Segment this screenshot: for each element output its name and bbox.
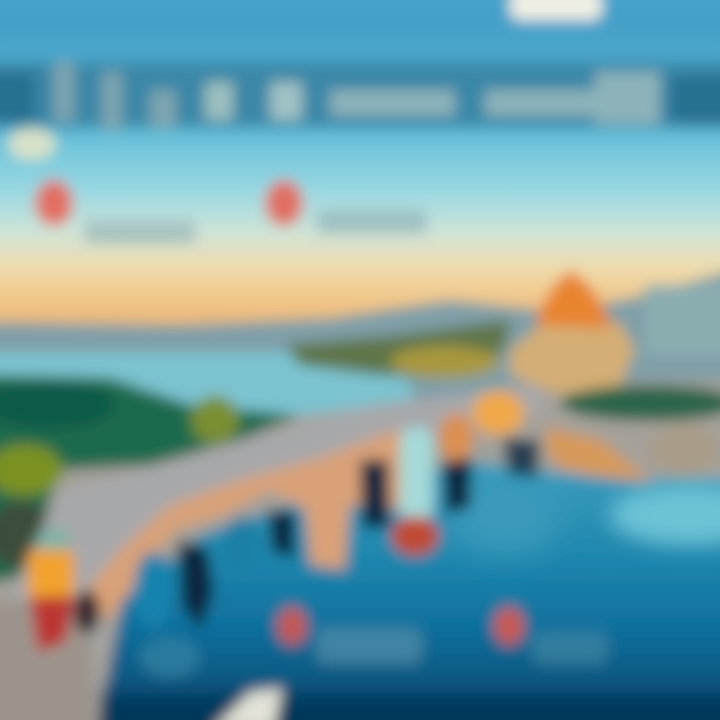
heading text placeholder: illegible title, right words	[270, 72, 660, 124]
colourful stall	[28, 529, 100, 652]
icon: red marker left	[35, 180, 73, 226]
right towers	[645, 285, 720, 355]
pale vertical water gap	[400, 428, 433, 520]
castle with dome	[510, 270, 720, 395]
ground under bridge	[0, 380, 720, 720]
arch: shadows	[178, 438, 540, 630]
bridge deck	[0, 385, 545, 720]
text placeholder: sky right caption	[316, 210, 428, 234]
light water right	[610, 485, 720, 545]
marker group: water left	[277, 607, 422, 664]
left green trees	[0, 375, 300, 585]
bridge	[0, 385, 652, 720]
bridge end masonry	[0, 600, 100, 720]
text placeholder: sky left caption	[84, 220, 196, 244]
icon: red marker water right	[494, 607, 524, 645]
badge: top pale label	[510, 0, 602, 20]
orange highlight	[472, 391, 524, 435]
dark water band	[90, 695, 720, 720]
marker group: water right	[494, 607, 608, 664]
castle base	[510, 322, 635, 395]
far green island	[285, 320, 510, 378]
text placeholder: water right caption	[532, 632, 608, 664]
stall dark shadow	[74, 590, 100, 634]
sky background	[0, 0, 720, 330]
deep water	[95, 462, 720, 720]
right green trees	[560, 385, 720, 476]
arch openings: water	[134, 552, 172, 628]
badge: small pale label left	[8, 128, 56, 160]
marker group: sky right	[265, 180, 428, 234]
icon: red marker right	[265, 180, 303, 226]
text placeholder: lower left caption	[140, 638, 200, 678]
dome	[535, 270, 612, 328]
stall red base	[30, 596, 74, 652]
bridge warm parapet	[78, 430, 420, 620]
stall teal top	[36, 529, 72, 551]
red boat	[391, 516, 439, 556]
pale far water	[0, 352, 420, 420]
stall yellow body	[28, 550, 74, 598]
icon: red marker water left	[277, 607, 307, 645]
text placeholder: water left caption	[316, 628, 422, 664]
header band	[0, 62, 720, 130]
marker group: sky left	[35, 180, 196, 244]
distant hills	[0, 268, 720, 420]
heading text placeholder: illegible title, left word	[54, 62, 233, 130]
boat: white bottom	[212, 688, 282, 720]
orange pier	[439, 413, 473, 461]
right shore orange	[546, 428, 652, 482]
